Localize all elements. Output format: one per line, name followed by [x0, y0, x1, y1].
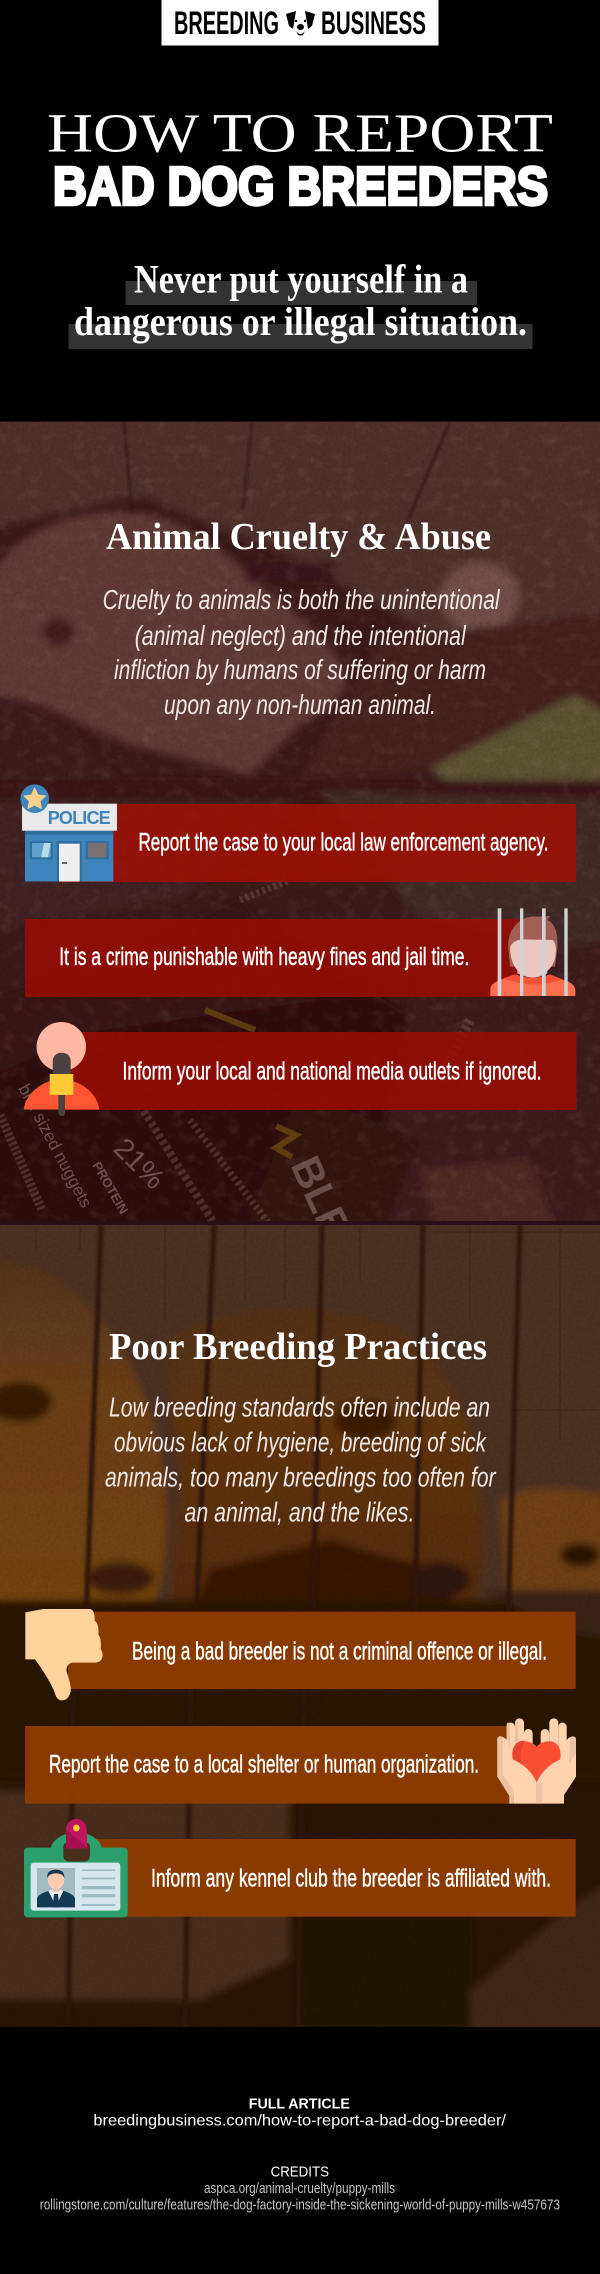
footer: full article: FULL ARTICLE [249, 2096, 350, 2113]
footer: credits: CREDITS [271, 2163, 329, 2180]
background photo: neglected dog and food bag: PROTEIN [89, 1159, 131, 1217]
icon: thumbs down [25, 1609, 103, 1700]
logo: BUSINESS [321, 5, 426, 41]
background photo: neglected dog and food bag: BLE [282, 1149, 360, 1245]
heading: animal cruelty: Animal Cruelty & Abuse [106, 516, 491, 558]
title [47, 102, 553, 216]
callout: inform kennel club [24, 1819, 576, 1917]
logo [162, 0, 438, 46]
text block: cruelty definition: (animal neglect) and the intentional [135, 620, 466, 651]
text block: cruelty definition: infliction by humans of suffering or harm [114, 654, 486, 685]
panel: poor breeding practices [0, 1215, 600, 2040]
footer: full article [93, 2096, 507, 2130]
callout: inform media [24, 1022, 576, 1116]
icon: police station [20, 784, 117, 882]
icon: id badge [24, 1819, 128, 1917]
text block: cruelty definition [103, 584, 500, 720]
background photo: neglected dog and food bag: 21% [107, 1132, 171, 1196]
icon: reporter with microphone [24, 1022, 99, 1116]
background photo: neglected dog and food bag: bite sized nuggets [14, 1081, 96, 1211]
text block: cruelty definition: upon any non-human animal. [164, 689, 436, 720]
icon: police station: POLICE [48, 808, 111, 828]
background photo: dogs in a cage [0, 1215, 600, 2040]
warning subtitle: dangerous or illegal situation. [74, 299, 527, 344]
warning subtitle [68, 257, 532, 349]
text block: breeding standards [105, 1392, 497, 1528]
icon: person behind bars [490, 908, 575, 996]
callout: crime and jail [25, 908, 575, 997]
callout: not a criminal offence [25, 1609, 576, 1700]
icon: hands holding heart [497, 1718, 576, 1804]
callout: report to police [20, 784, 576, 882]
footer: credits: aspca.org/animal-cruelty/puppy-mills [204, 2180, 395, 2197]
background photo: neglected dog and food bag [0, 410, 600, 1245]
warning subtitle: Never put yourself in a [134, 257, 468, 302]
heading: poor breeding practices: Poor Breeding Practices [109, 1326, 487, 1368]
callout: report to shelter [25, 1718, 576, 1804]
title: HOW TO REPORT [47, 102, 553, 164]
logo: BREEDING [174, 5, 279, 41]
footer: credits [40, 2163, 560, 2214]
text block: breeding standards: Low breeding standards often include an [109, 1392, 490, 1423]
footer: full article: breedingbusiness.com/how-to-report-a-bad-dog-breeder/ [93, 2113, 507, 2130]
panel: animal cruelty and abuse [0, 410, 600, 1245]
icon: dog head [286, 11, 315, 36]
text block: breeding standards: an animal, and the likes. [184, 1497, 414, 1528]
